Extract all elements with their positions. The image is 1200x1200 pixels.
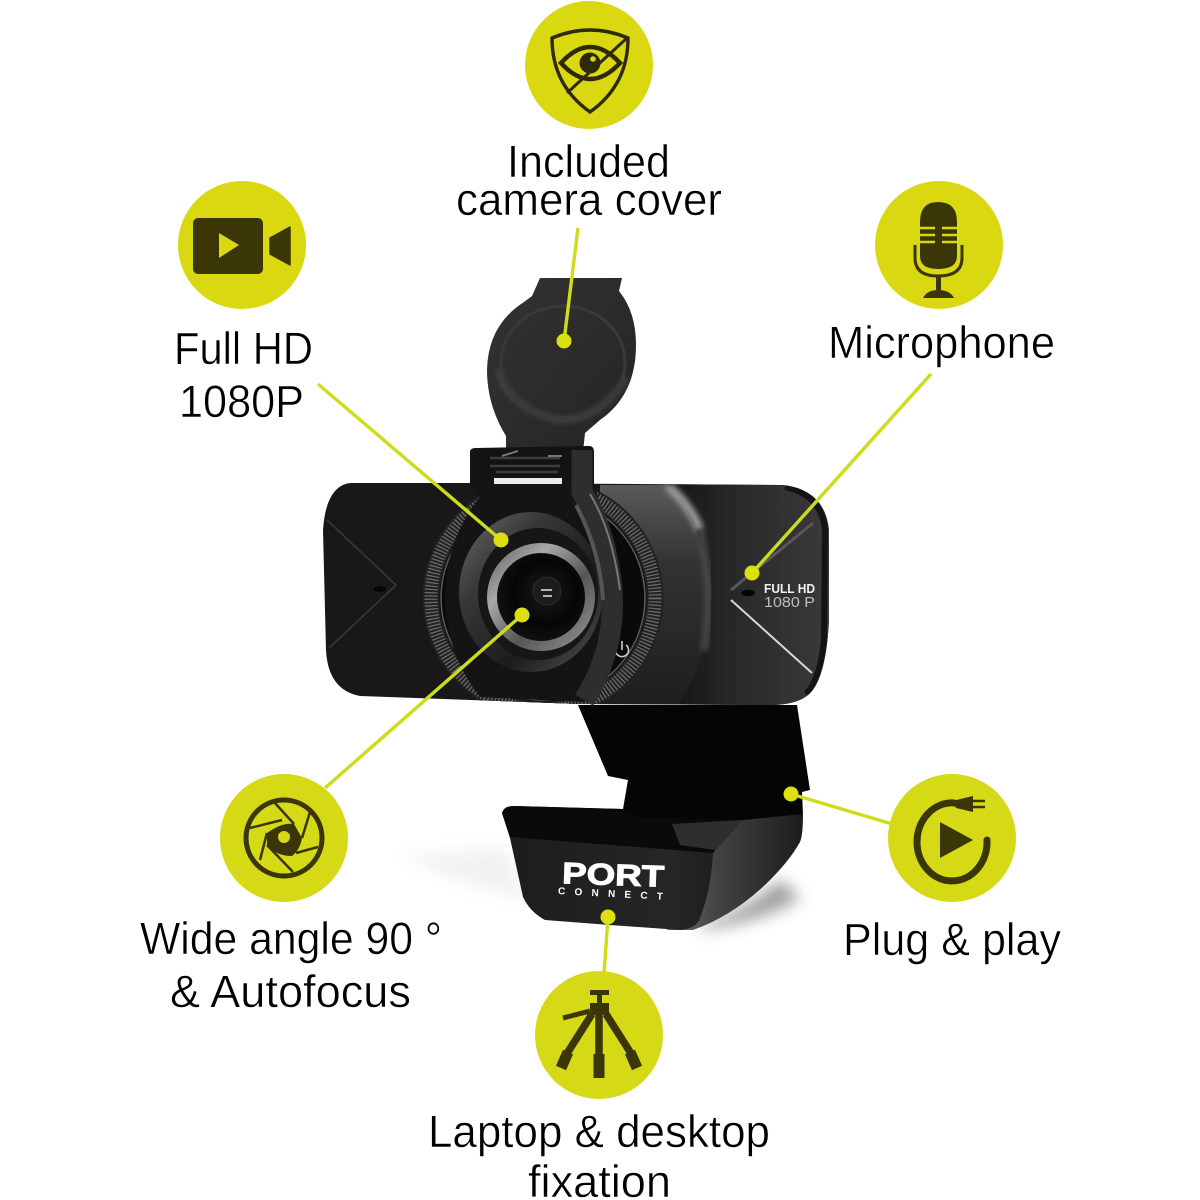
icon: tripod: [535, 971, 663, 1099]
heading: full HD: [174, 323, 313, 427]
heading: plug and play: Plug & play: [843, 914, 1061, 965]
heading: camera cover: [456, 136, 722, 225]
cover clip frame: [445, 446, 615, 702]
lens assembly: [459, 512, 603, 672]
callout line: microphone: [744, 374, 931, 580]
webcam illustration: [323, 278, 830, 930]
base clip: CONNECT: [558, 886, 663, 903]
heading: wide angle: & Autofocus: [170, 966, 411, 1017]
heading: full HD: 1080P: [179, 376, 304, 427]
stand arm: [578, 705, 810, 830]
base clip: [502, 806, 803, 930]
heading: full HD: Full HD: [174, 323, 313, 374]
logo: PORT: [562, 857, 665, 894]
power icon: [616, 641, 629, 657]
icon: camera cover eye shield: [525, 1, 653, 129]
callout line: full HD: [318, 384, 508, 548]
chamfer lines: [327, 520, 396, 648]
camera label: 1080 P: [764, 594, 815, 611]
cover flap: [487, 278, 636, 452]
knurled ring: [431, 486, 655, 710]
heading: fixation: Laptop & desktop: [428, 1106, 770, 1157]
camera label: [764, 582, 815, 611]
heading: microphone: Microphone: [828, 317, 1055, 368]
heading: wide angle: [140, 913, 442, 1017]
camera body: [323, 483, 829, 705]
callout line: plug and play: [784, 786, 892, 824]
icon: aperture: [220, 774, 348, 902]
base shadow: [400, 848, 800, 930]
callout line: fixation: [600, 910, 616, 974]
callout line: wide angle: [325, 608, 530, 788]
housing regions: [600, 485, 712, 706]
callout line: camera cover: [556, 228, 578, 348]
icon: video camera: [178, 181, 306, 309]
heading: wide angle: Wide angle 90 °: [140, 913, 442, 964]
curved highlight: [668, 486, 700, 530]
clip right leg: [576, 450, 620, 700]
heading: camera cover: camera cover: [456, 174, 722, 225]
heading: fixation: [428, 1106, 770, 1200]
camera label: FULL HD: [764, 582, 815, 596]
heading: camera cover: Included: [507, 136, 670, 187]
icon: plug and play: [888, 774, 1016, 902]
icon: microphone: [875, 181, 1003, 309]
